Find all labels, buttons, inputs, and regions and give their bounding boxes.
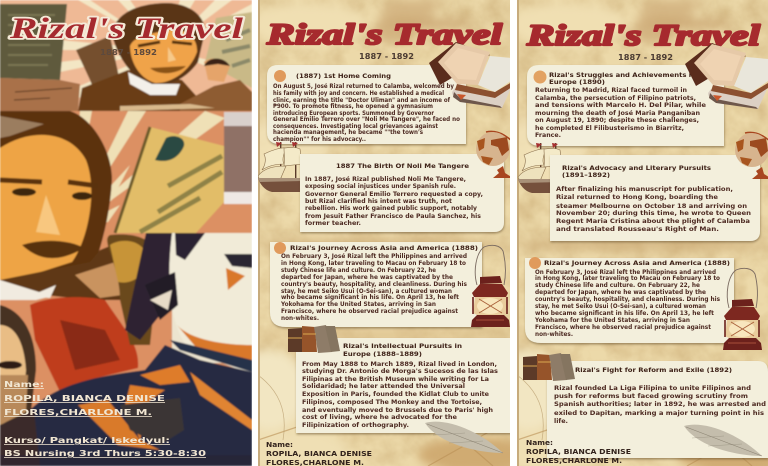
card: intellectual pursuits in Europe: From May 1888 to March 1889, Rizal lived in London, <box>302 362 497 368</box>
card: 1887 first home coming <box>267 65 466 144</box>
face <box>112 3 205 85</box>
card text: champion"" for his advocacy.. <box>273 137 366 143</box>
date range: 1887 - 1892 <box>359 52 414 61</box>
parchment background <box>517 0 768 466</box>
icon: lantern <box>723 268 762 350</box>
card text: hacienda management, he became ""the town's <box>273 130 424 136</box>
author and schedule credits: FLORES,CHARLONE M. <box>4 408 152 417</box>
author names: Name: <box>526 439 553 447</box>
card: birth of Noli Me Tangere: exposing social injustices under Spanish rule. <box>305 184 456 190</box>
left portrait <box>0 305 36 440</box>
card text: clinic, earning the title "Doctor Uliman" and an income of <box>273 98 450 104</box>
author names: ROPILA, BIANCA DENISE <box>526 448 631 456</box>
bullet icon <box>534 70 546 84</box>
icon: ship <box>258 142 302 192</box>
card: journey across Asia and America: On February 3, José Rizal left the Philippines and arrived <box>535 269 716 276</box>
collar <box>128 72 180 95</box>
title: Rizal's Travel <box>9 12 244 45</box>
card: birth of Noli Me Tangere: 1887 The Birth Of Noli Me Tangere <box>336 164 469 170</box>
card: journey across Asia and America: country's beauty, hospitality, and cleanliness. During his <box>281 282 468 288</box>
coat <box>77 69 196 112</box>
blurred block <box>223 125 252 192</box>
card: struggles and achievements in Europe: he completed El Filibusterismo in Biarritz, <box>535 126 684 132</box>
card: advocacy and literary pursuits: After finalizing his manuscript for publication, <box>556 187 733 193</box>
bullet icon <box>274 70 286 82</box>
card: journey across Asia and America: On February 3, José Rizal left the Philippines and arrived <box>281 253 467 260</box>
card: advocacy and literary pursuits <box>550 155 760 241</box>
author and schedule credits: BS Nursing 3rd Thurs 5:30-8:30 <box>4 449 206 458</box>
card: birth of Noli Me Tangere: former teacher. <box>305 221 361 227</box>
date range: 1887 - 1892 <box>100 48 157 57</box>
panel: cover collage <box>0 0 252 466</box>
seated man <box>204 59 230 82</box>
icon: globe <box>735 132 768 179</box>
card: journey across Asia and America: Yokohama for the United States, arriving in San <box>280 302 436 308</box>
card: advocacy and literary pursuits: and translated Rousseau's Right of Man. <box>556 227 719 233</box>
white portrait <box>170 309 222 364</box>
card text: consequences. Investigating local grievances against <box>273 124 438 130</box>
author and schedule credits: Kurso/ Pangkat/ Iskedyul: <box>4 436 170 445</box>
card: journey across Asia and America: departed for Japan, where he was captivated by the <box>535 290 706 296</box>
card: fight for reform and exile: life. <box>554 419 568 425</box>
icon: feather <box>684 425 762 456</box>
card: journey across Asia and America: stay, he met Seiko Usui (O-Sei-san), a cultured woman <box>535 304 706 310</box>
lower collage <box>0 110 252 409</box>
small portrait <box>107 234 158 345</box>
card: advocacy and literary pursuits: Rizal's Advocacy and Literary Pursuits <box>562 166 712 172</box>
card: birth of Noli Me Tangere: rebellion. His work gained public support, notably <box>305 206 477 212</box>
card: journey across Asia and America: in Hong Kong, later traveling to Macau on February 18 to <box>281 261 466 267</box>
icon: stacked books <box>523 353 575 381</box>
card: struggles and achievements in Europe: Calamba, the persecution of Filipino patriots, <box>535 96 696 102</box>
card: struggles and achievements in Europe: Rizal's Struggles and Achievements in <box>549 73 696 79</box>
panel: second timeline page <box>517 0 768 466</box>
icon: open book <box>429 42 512 108</box>
card: advocacy and literary pursuits: steamer Melbourne on October 18 and arriving on <box>556 204 747 210</box>
bullet icon <box>529 257 541 269</box>
card: advocacy and literary pursuits: Regent Maria Cristina about the plight of Calamba <box>556 219 750 225</box>
card: journey across Asia and America: who became significant in his life. On April 13, he left <box>281 295 459 301</box>
icon: open book <box>685 43 768 109</box>
card: journey across Asia and America: in Hong Kong, later traveling to Macau on February 18 to <box>535 276 720 282</box>
manuscript <box>0 4 67 80</box>
icon: ship <box>518 143 562 193</box>
card: fight for reform and exile: Rizal founded La Liga Filipina to unite Filipinos and <box>554 386 751 392</box>
card: intellectual pursuits in Europe: Rizal's Intellectual Pursuits in <box>343 344 462 350</box>
card: intellectual pursuits in Europe: cost of living, where he advocated for the <box>302 415 457 421</box>
card: struggles and achievements in Europe: France. <box>535 133 561 139</box>
card: journey across Asia and America: Francisco, where he observed racial prejudice against <box>281 309 458 315</box>
panel: first timeline page <box>258 0 510 466</box>
bullet icon <box>274 242 286 254</box>
card: journey across Asia and America: non-whites. <box>281 316 319 322</box>
card text: ₱900. To promote fitness, he opened a gymnasium <box>273 104 433 110</box>
card text: General Emilio Terrero over "Noli Me Tangere", he faced no <box>273 117 460 123</box>
title: Rizal's Travel <box>266 18 503 51</box>
card: journey across Asia and America: Yokohama for the United States, arriving in San <box>534 318 690 324</box>
card: birth of Noli Me Tangere <box>300 154 504 232</box>
card: struggles and achievements in Europe: and tensions with Marcelo H. Del Pilar, while <box>535 103 706 109</box>
card: journey across Asia and America: departed for Japan, where he was captivated by the <box>281 275 453 281</box>
card: journey across Asia and America: who became significant in his life. On April 13, he left <box>535 311 714 317</box>
card: intellectual pursuits in Europe: studying Dr. Antonio de Morga's Sucesos de las Islas <box>302 369 499 375</box>
standing figure <box>76 37 120 86</box>
author names <box>526 439 631 465</box>
card: birth of Noli Me Tangere: but Rizal clarified his intent was truth, not <box>305 199 452 205</box>
card: fight for reform and exile: Rizal's Fight for Reform and Exile (1892) <box>575 368 732 374</box>
big face hair <box>0 110 113 272</box>
dark coat <box>30 345 252 466</box>
icon: globe <box>476 130 510 178</box>
card: journey across Asia and America: Rizal's Journey Across Asia and America (1888) <box>544 261 730 267</box>
card text <box>273 74 460 143</box>
icon: stacked books <box>288 325 340 353</box>
card: intellectual pursuits in Europe: Filipinas at the British Museum while writing for La <box>302 377 489 383</box>
card: intellectual pursuits in Europe <box>296 338 512 433</box>
red figure <box>30 297 138 392</box>
author names <box>266 441 372 466</box>
card: birth of Noli Me Tangere: from Jesuit Father Francisco de Paula Sanchez, his <box>305 214 482 220</box>
card: intellectual pursuits in Europe: Filipinos, composed The Monkey and the Tortoise, <box>302 400 482 406</box>
parchment background <box>258 0 510 466</box>
card: intellectual pursuits in Europe: and eventually moved to Brussels due to Paris' high <box>302 408 493 414</box>
card: journey across Asia and America: non-whites. <box>535 332 573 338</box>
card: fight for reform and exile: exiled to Dapitan, marking a major turning point in his <box>554 411 765 417</box>
card: advocacy and literary pursuits: Rizal returned to Hong Kong, boarding the <box>556 195 718 201</box>
card: intellectual pursuits in Europe: Exposition in Paris, founded the Kidlat Club to unite <box>302 392 489 398</box>
card: fight for reform and exile: Spanish authorities; later in 1892, he was arrested and <box>554 402 766 408</box>
author names: FLORES,CHARLONE M. <box>526 457 622 465</box>
card: struggles and achievements in Europe: Returning to Madrid, Rizal faced turmoil in <box>535 88 687 94</box>
cover artwork <box>0 0 252 466</box>
card: journey across Asia and America: study Chinese life and culture. On February 22, he <box>281 268 436 274</box>
author names: Name: <box>266 441 293 449</box>
card: birth of Noli Me Tangere: In 1887, José Rizal published Noli Me Tangere, <box>305 176 466 183</box>
card: fight for reform and exile <box>547 361 768 458</box>
noli book <box>115 127 224 233</box>
icon: feather <box>425 422 503 453</box>
card: journey across Asia and America: study Chinese life and culture. On February 22, he <box>535 283 700 289</box>
card: journey across Asia and America <box>525 257 734 343</box>
author names: ROPILA, BIANCA DENISE <box>266 450 372 458</box>
title: Rizal's Travel <box>526 19 761 52</box>
date range: 1887 - 1892 <box>618 53 673 62</box>
card: journey across Asia and America: Francisco, where he observed racial prejudice against <box>535 325 711 331</box>
card: journey across Asia and America: Rizal's Journey Across Asia and America (1888) <box>290 246 478 252</box>
card text: introducing European sports. Summoned by Governor <box>273 111 434 117</box>
card: birth of Noli Me Tangere: Governor General Emilio Terrero requested a copy, <box>305 192 483 198</box>
card text: On August 5, José Rizal returned to Calamba, welcomed by <box>273 83 454 90</box>
card text: his family with joy and concern. He established a medical <box>273 91 444 97</box>
card: struggles and achievements in Europe <box>527 65 724 146</box>
card: fight for reform and exile: push for reforms but faced growing scrutiny from <box>554 394 748 400</box>
author and schedule credits <box>4 380 206 458</box>
card: advocacy and literary pursuits: November 20; during this time, he wrote to Queen <box>556 211 751 217</box>
card: struggles and achievements in Europe: on August 19, 1890; despite these challenges, <box>535 118 699 124</box>
card: intellectual pursuits in Europe: Europe (1888–1889) <box>343 352 422 358</box>
card: journey across Asia and America <box>270 242 482 327</box>
icon: lantern <box>471 245 510 327</box>
card: struggles and achievements in Europe: Europe (1890) <box>549 80 605 86</box>
card: struggles and achievements in Europe: mourning the death of José Maria Panganiban <box>535 110 700 117</box>
author and schedule credits: ROPILA, BIANCA DENISE <box>4 394 165 403</box>
card: journey across Asia and America: stay, he met Seiko Usui (O-Sei-san), a cultured woman <box>281 289 452 295</box>
card text: (1887) 1st Home Coming <box>296 74 391 80</box>
author and schedule credits: Name: <box>4 380 44 389</box>
card: advocacy and literary pursuits: (1891–1892) <box>562 173 610 179</box>
card: journey across Asia and America: country's beauty, hospitality, and cleanliness. During his <box>535 297 721 303</box>
card: intellectual pursuits in Europe: Solidaridad; he later attended the Universal <box>302 384 465 390</box>
card: intellectual pursuits in Europe: Filipinization of orthography. <box>302 423 409 429</box>
